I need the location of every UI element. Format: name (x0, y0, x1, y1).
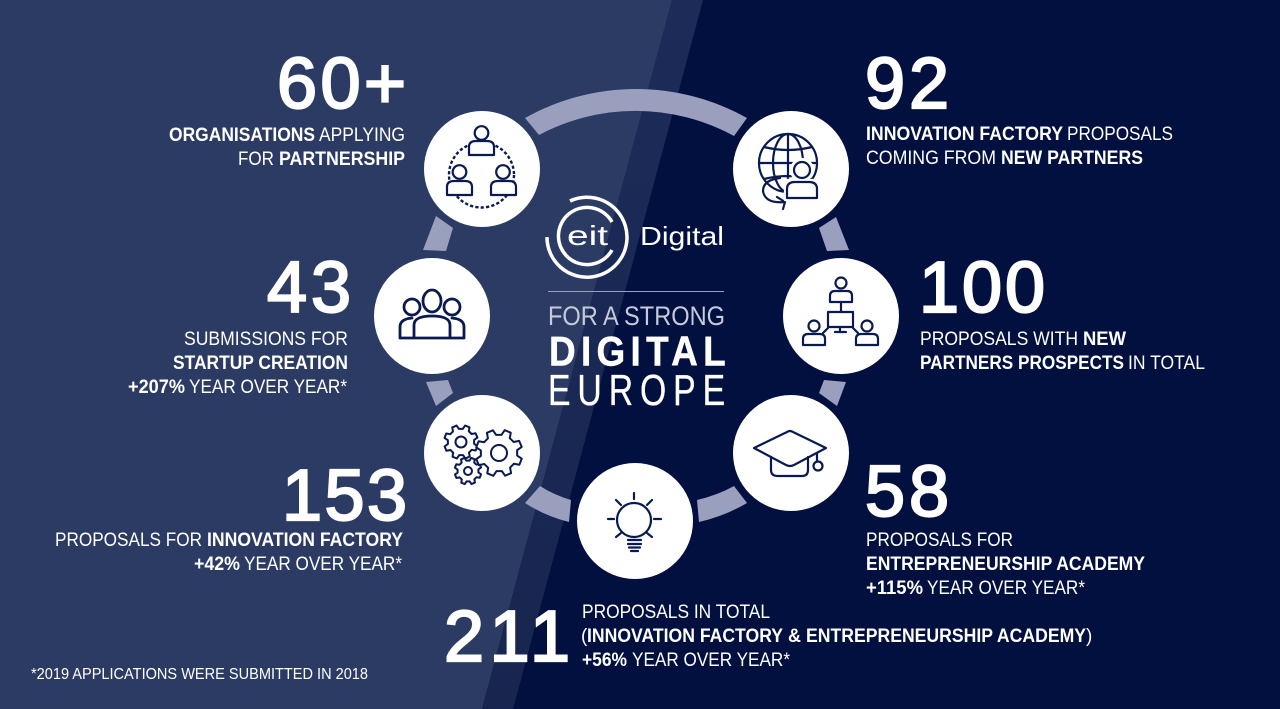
stat: 58 entrepreneurship academy: 58 (865, 452, 949, 532)
stat: 43 startup creation: YEAR OVER YEAR* (189, 377, 348, 398)
stat: 60+ organisations (169, 44, 406, 170)
stat: 92 new partners: COMING FROM (866, 148, 996, 169)
center title: DIGITAL (549, 328, 731, 374)
stat: 211 proposals in total: & (788, 626, 801, 647)
gears (439, 420, 529, 488)
stat: 153 innovation factory: 153 (282, 456, 407, 536)
stat: 92 new partners: INNOVATION FACTORY (866, 124, 1063, 145)
stat: 92 new partners: PROPOSALS (1067, 124, 1173, 145)
center title (548, 301, 732, 415)
stat: 60+ organisations: FOR (238, 149, 274, 170)
stat: 211 proposals in total (444, 597, 1092, 677)
logo: EIT Digital: Digital (640, 221, 724, 251)
white circle 6 with graduation cap icon (733, 395, 849, 511)
logo: EIT Digital (547, 197, 724, 277)
stat: 92 new partners: NEW PARTNERS (1001, 148, 1143, 169)
stat: 58 entrepreneurship academy: ENTREPRENEURSHIP ACADEMY (866, 554, 1145, 575)
white circle 4 with network icon (783, 258, 899, 374)
stat: 43 startup creation: 43 (267, 248, 351, 328)
stat: 60+ organisations: APPLYING (319, 125, 405, 146)
stat: 58 entrepreneurship academy: PROPOSALS FOR (866, 530, 1013, 551)
white circle 3 with people icon (374, 258, 490, 374)
stat: 153 innovation factory: INNOVATION FACTORY (207, 530, 403, 551)
white circle 7 with light bulb icon (577, 463, 693, 579)
stat: 43 startup creation: STARTUP CREATION (173, 353, 348, 374)
stat: 100 partner prospects: PARTNERS PROSPECTS (920, 353, 1124, 374)
stat: 100 partner prospects (919, 248, 1205, 374)
footnote: *2019 APPLICATIONS WERE SUBMITTED IN 2018 (31, 666, 368, 683)
stat: 211 proposals in total: ) (1086, 626, 1092, 647)
stat: 100 partner prospects: IN TOTAL (1128, 353, 1205, 374)
stat: 211 proposals in total: ENTREPRENEURSHIP ACADEMY (806, 626, 1086, 647)
stat: 211 proposals in total: INNOVATION FACTORY (587, 626, 783, 647)
divider (548, 291, 724, 292)
white circle 1 with partnership icon (424, 111, 540, 227)
stat: 92 new partners: 92 (865, 44, 949, 124)
stat: 153 innovation factory: YEAR OVER YEAR* (244, 554, 403, 575)
white circle 2 with globe icon (733, 111, 849, 227)
stat: 211 proposals in total: +56% (582, 650, 627, 671)
logo: EIT Digital: eit (567, 220, 608, 251)
stat: 60+ organisations: 60+ (277, 44, 406, 124)
stat: 211 proposals in total: ( (581, 626, 588, 647)
stat: 211 proposals in total: YEAR OVER YEAR* (632, 650, 791, 671)
stat: 100 partner prospects: NEW (1083, 329, 1126, 350)
stat: 211 proposals in total: 211 (444, 597, 570, 677)
stat: 43 startup creation: +207% (128, 377, 185, 398)
stat: 100 partner prospects: PROPOSALS WITH (920, 329, 1078, 350)
stat: 100 partner prospects: 100 (919, 248, 1045, 328)
center title: FOR A STRONG (548, 301, 725, 331)
stat: 153 innovation factory (55, 456, 407, 575)
stat: 153 innovation factory: +42% (194, 554, 240, 575)
white circle 5 with gears icon (424, 395, 540, 511)
stat: 58 entrepreneurship academy (865, 452, 1145, 599)
stat: 58 entrepreneurship academy: +115% (866, 578, 923, 599)
stat: 43 startup creation (128, 248, 351, 398)
stat: 211 proposals in total: PROPOSALS IN TOTAL (582, 602, 770, 623)
ring segments (423, 89, 849, 522)
center title: EUROPE (548, 366, 732, 415)
stat: 58 entrepreneurship academy: YEAR OVER YEAR* (927, 578, 1086, 599)
stat: 92 new partners (865, 44, 1173, 169)
stat: 60+ organisations: PARTNERSHIP (279, 149, 405, 170)
stat: 43 startup creation: SUBMISSIONS FOR (184, 329, 348, 350)
stat: 60+ organisations: ORGANISATIONS (169, 125, 315, 146)
stat: 153 innovation factory: PROPOSALS FOR (55, 530, 202, 551)
